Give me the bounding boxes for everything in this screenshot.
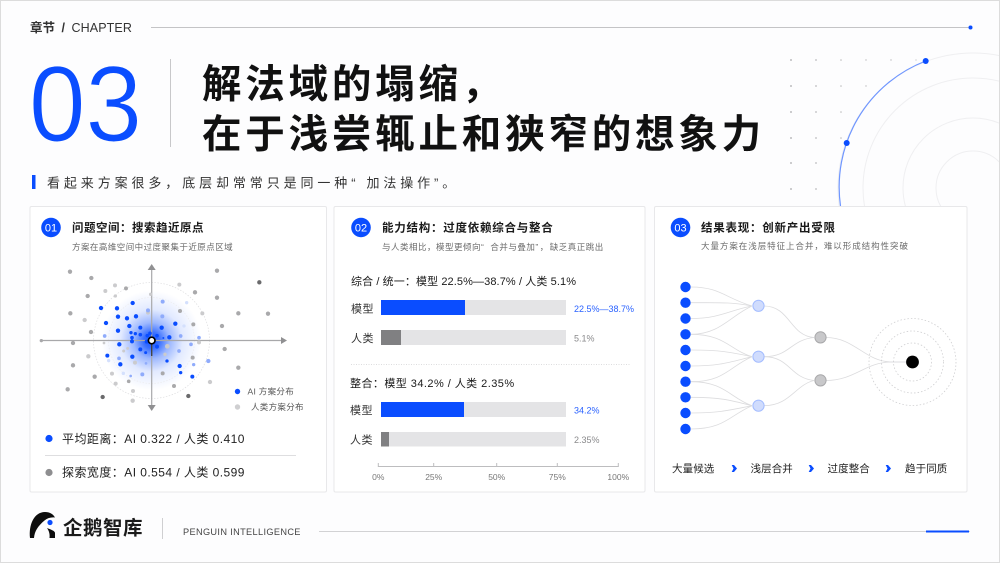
subtitle: 看起来方案很多，底层却常常只是同一种“ 加法操作”。 [47, 176, 459, 190]
bar group: synthesis [351, 274, 634, 345]
convergence network [680, 282, 956, 434]
logo divider [162, 518, 164, 539]
chapter number: 03 [29, 43, 142, 164]
panel description: 与人类相比，模型更倾向“ 合并与叠加”，缺乏真正跳出 [382, 242, 604, 252]
badge 02 [351, 218, 371, 237]
process labels [672, 462, 947, 475]
panel: outcome [654, 206, 967, 492]
stat: exploration breadth: 探索宽度：AI 0.554 / 人类 0.599 [62, 464, 245, 480]
icon: penguin [30, 512, 55, 538]
bar group: integration: 整合：模型 34.2% / 人类 2.35% [350, 376, 515, 390]
logo: 企鹅智库 [63, 516, 143, 540]
panel description: 大量方案在浅层特征上合并，难以形成结构性突破 [701, 241, 909, 251]
badge 03: 03 [674, 222, 687, 234]
percentage axis: 25% [425, 472, 443, 482]
bar group: synthesis: 人类 [351, 331, 374, 345]
bar group: synthesis: 模型 [351, 302, 374, 316]
badge 01: 01 [45, 222, 57, 234]
bar group: synthesis: 综合 / 统一：模型 22.5%—38.7% / 人类 5.1% [351, 274, 576, 288]
title [202, 63, 765, 157]
bar group: integration: 人类 [350, 432, 373, 446]
footer rule with accent [319, 530, 970, 532]
panel description: 方案在高维空间中过度聚集于近原点区域 [72, 242, 233, 252]
legend [235, 386, 304, 412]
panel: capability structure [334, 206, 645, 492]
badge 02: 02 [355, 222, 367, 234]
panel heading: 能力结构：过度依赖综合与整合 [382, 220, 554, 234]
bar group: integration: 模型 [350, 403, 373, 417]
title: 在于浅尝辄止和狭窄的想象力 [202, 113, 765, 157]
percentage axis: 50% [488, 472, 506, 482]
logo [30, 512, 143, 540]
process labels: 浅层合并 [750, 462, 793, 475]
header rule with end dot [151, 26, 972, 30]
bar group: integration: 2.35% [574, 435, 600, 445]
percentage axis: 75% [549, 472, 566, 482]
process labels: 大量候选 [672, 462, 715, 475]
title: 解法域的塌缩， [202, 63, 505, 107]
decorative rings and arc [790, 52, 999, 206]
percentage axis [372, 463, 630, 482]
panel: search space [30, 206, 326, 492]
panel heading: 结果表现：创新产出受限 [701, 220, 836, 234]
chapter label: 章节 / CHAPTER [30, 20, 132, 35]
percentage axis: 100% [607, 472, 630, 482]
legend: AI 方案分布 [248, 386, 294, 396]
title divider [170, 59, 172, 147]
process labels: 过度整合 [828, 462, 870, 475]
bar group: synthesis: 5.1% [574, 334, 595, 344]
process labels: 趋于同质 [905, 462, 947, 475]
badge 01 [41, 218, 61, 237]
scatter chart [40, 264, 287, 411]
percentage axis: 0% [372, 472, 385, 482]
bar group: synthesis: 22.5%—38.7% [574, 304, 634, 314]
english brand name: PENGUIN INTELLIGENCE [183, 527, 301, 537]
panel heading: 问题空间：搜索趋近原点 [72, 220, 204, 234]
legend: 人类方案分布 [251, 402, 304, 412]
badge 03 [671, 218, 690, 237]
bar group: integration: 34.2% [574, 406, 600, 416]
stat: mean distance: 平均距离：AI 0.322 / 人类 0.410 [62, 431, 245, 446]
bar group: integration [350, 376, 600, 446]
